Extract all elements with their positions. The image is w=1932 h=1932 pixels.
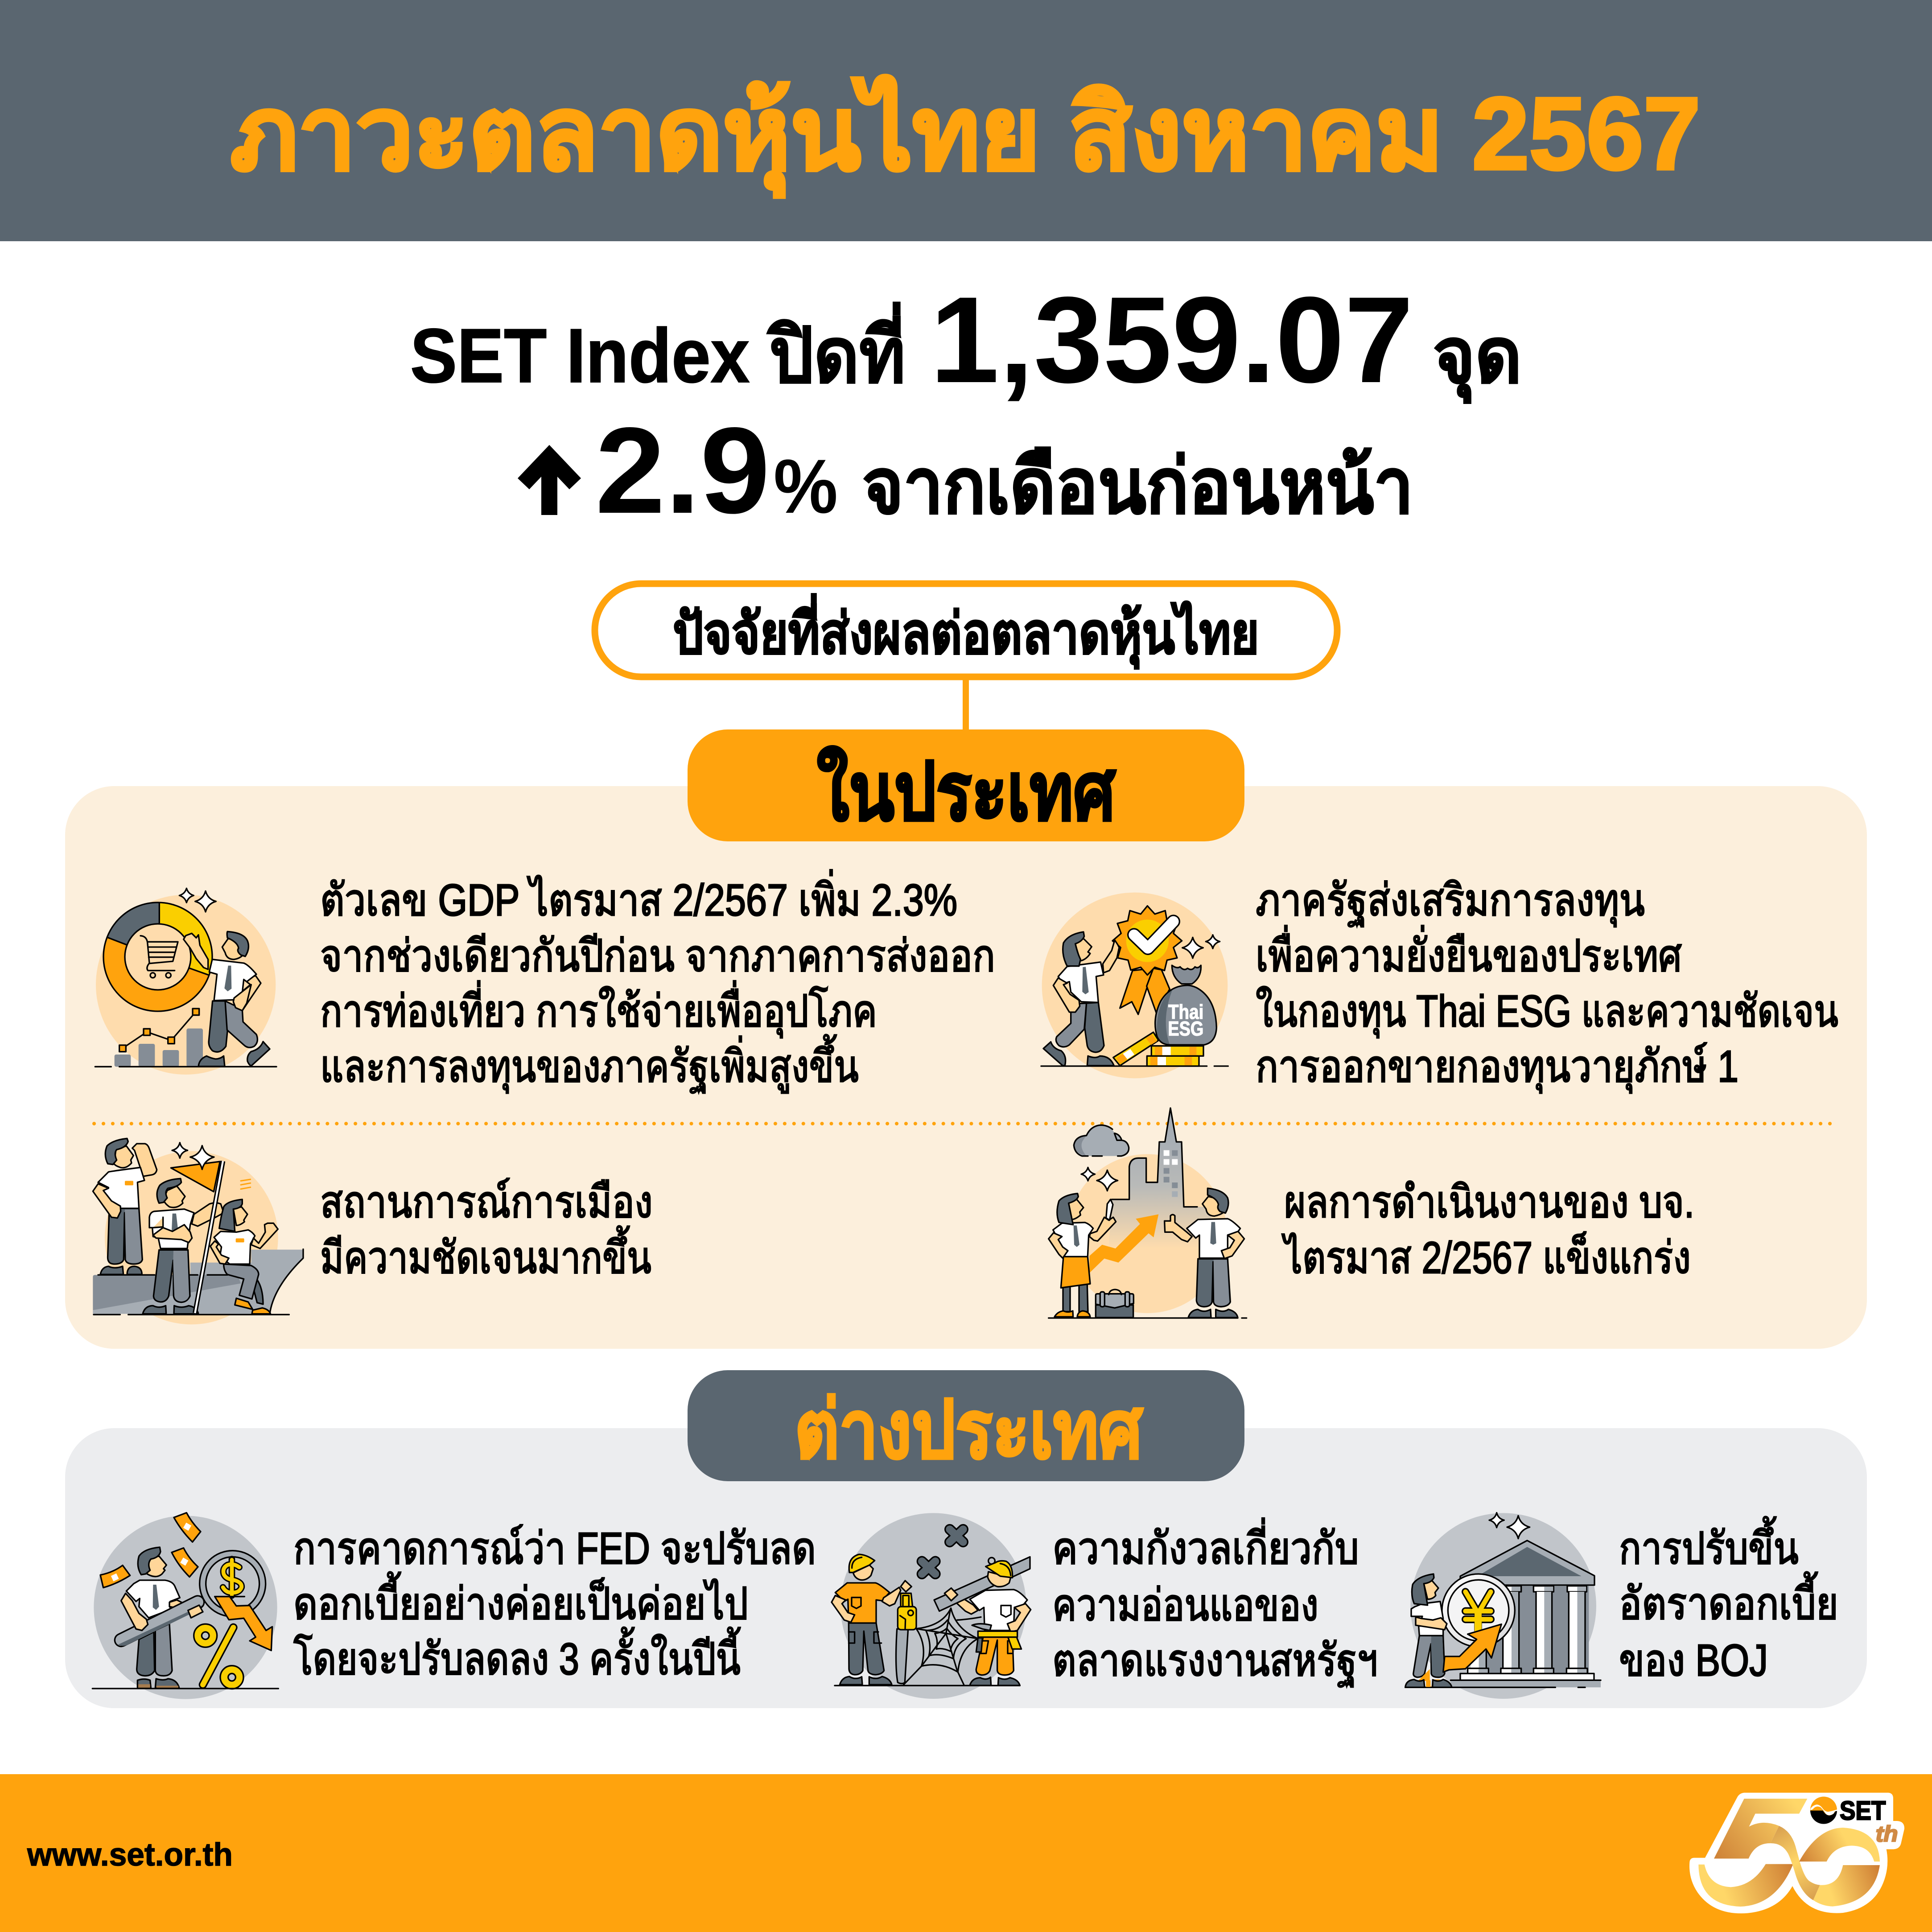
person: woman seated xyxy=(210,1199,278,1314)
text: listed company results: ไตรมาส 2/2567 แข็งแกร่ง xyxy=(1281,1231,1691,1283)
icon: bank with yen coin xyxy=(1405,1513,1601,1699)
text: Thai ESG xyxy=(1256,875,1838,1094)
padlock tool xyxy=(896,1593,916,1684)
text: BOJ xyxy=(1619,1516,1838,1685)
text: politics xyxy=(320,1177,653,1283)
logo: SET 50th: th xyxy=(1876,1821,1898,1846)
icon: team with flag xyxy=(93,1138,303,1324)
text: BOJ: ของ BOJ xyxy=(1619,1635,1768,1685)
logo: SET 50th: SET xyxy=(1840,1796,1886,1825)
factors pill: ปัจจัยที่ส่งผลต่อตลาดหุ้นไทย xyxy=(673,593,1259,669)
footer band xyxy=(0,1774,1932,1932)
icon: workers, padlock and spider web xyxy=(832,1513,1031,1699)
headline: monthly change: % xyxy=(774,444,838,529)
text: listed company results xyxy=(1281,1177,1694,1283)
heading pill: international: ต่างประเทศ xyxy=(795,1385,1143,1475)
text: FED: ดอกเบี้ยอย่างค่อยเป็นค่อยไป xyxy=(293,1572,748,1629)
text: FED xyxy=(293,1524,816,1684)
text: US labour market xyxy=(1052,1518,1378,1688)
headline: SET Index close: SET Index ปิดที่ xyxy=(410,302,906,399)
text: BOJ: การปรับขึ้น xyxy=(1619,1516,1799,1574)
headline: SET Index close: จุด xyxy=(1433,313,1522,404)
text: politics: มีความชัดเจนมากขึ้น xyxy=(320,1226,651,1283)
text: BOJ: อัตราดอกเบี้ย xyxy=(1619,1572,1838,1629)
headline: monthly change: จากเดือนก่อนหน้า xyxy=(862,444,1413,529)
title: ภาวะตลาดหุ้นไทย สิงหาคม 2567 xyxy=(231,75,1701,198)
headline: SET Index close: 1,359.07 xyxy=(930,272,1413,408)
text: GDP xyxy=(320,869,995,1094)
text: GDP: จากช่วงเดียวกันปีก่อน จากภาคการส่งออก xyxy=(320,931,995,981)
factors pill xyxy=(595,584,1337,677)
connector line xyxy=(963,678,969,733)
panel: international xyxy=(65,1428,1867,1708)
icon: magnifier, falling dollar, percent xyxy=(92,1513,278,1699)
heading pill: domestic: ในประเทศ xyxy=(817,746,1116,837)
person: man with thumb up xyxy=(1165,1188,1244,1318)
logo: SET 50th xyxy=(1689,1793,1904,1913)
heading pill: domestic xyxy=(688,729,1244,841)
headline: monthly change xyxy=(523,402,1413,539)
icon: city growth with two people xyxy=(1049,1108,1247,1318)
person: woman with phone xyxy=(1049,1194,1116,1317)
icon: Thai ESG badge and money bag: ESG xyxy=(1168,1017,1203,1040)
heading pill: international xyxy=(688,1370,1244,1481)
header band xyxy=(0,0,1932,241)
icon: Thai ESG badge and money bag xyxy=(1041,893,1228,1078)
spider web xyxy=(904,1608,981,1685)
text: Thai ESG: ภาครัฐส่งเสริมการลงทุน xyxy=(1256,875,1645,927)
text: FED: การคาดการณ์ว่า FED จะปรับลด xyxy=(293,1524,816,1574)
text: Thai ESG: เพื่อความยั่งยืนของประเทศ xyxy=(1256,925,1682,981)
text: listed company results: ผลการดำเนินงานของ บจ. xyxy=(1284,1177,1694,1227)
text: GDP: การท่องเที่ยว การใช้จ่ายเพื่ออุปโภค xyxy=(320,980,877,1038)
text: GDP: ตัวเลข GDP ไตรมาส 2/2567 เพิ่ม 2.3% xyxy=(320,869,957,925)
text: politics: สถานการณ์การเมือง xyxy=(320,1177,653,1227)
text: FED: โดยจะปรับลดลง 3 ครั้งในปีนี้ xyxy=(293,1627,741,1684)
headline: monthly change: 2.9 xyxy=(595,402,770,539)
person: man holding flag xyxy=(143,1178,224,1314)
person: left man xyxy=(93,1138,157,1274)
headline: SET Index close xyxy=(410,272,1522,408)
worker: left xyxy=(832,1554,911,1685)
icon: GDP donut chart with man xyxy=(95,888,276,1075)
worker: right with beam xyxy=(934,1557,1031,1685)
website: www.set.or.th xyxy=(27,1837,233,1873)
text: US labour market: ความอ่อนแอของ xyxy=(1052,1580,1318,1630)
text: GDP: และการลงทุนของภาครัฐเพิ่มสูงขึ้น xyxy=(320,1034,859,1094)
icon: Thai ESG badge and money bag: Thai xyxy=(1168,1001,1203,1023)
text: US labour market: ตลาดแรงงานสหรัฐฯ xyxy=(1052,1635,1378,1688)
text: Thai ESG: การออกขายกองทุนวายุภักษ์ 1 xyxy=(1256,1042,1738,1094)
text: US labour market: ความกังวลเกี่ยวกับ xyxy=(1052,1518,1359,1574)
panel: domestic xyxy=(65,786,1867,1349)
flag pole xyxy=(195,1161,223,1313)
briefcase xyxy=(1096,1289,1133,1318)
